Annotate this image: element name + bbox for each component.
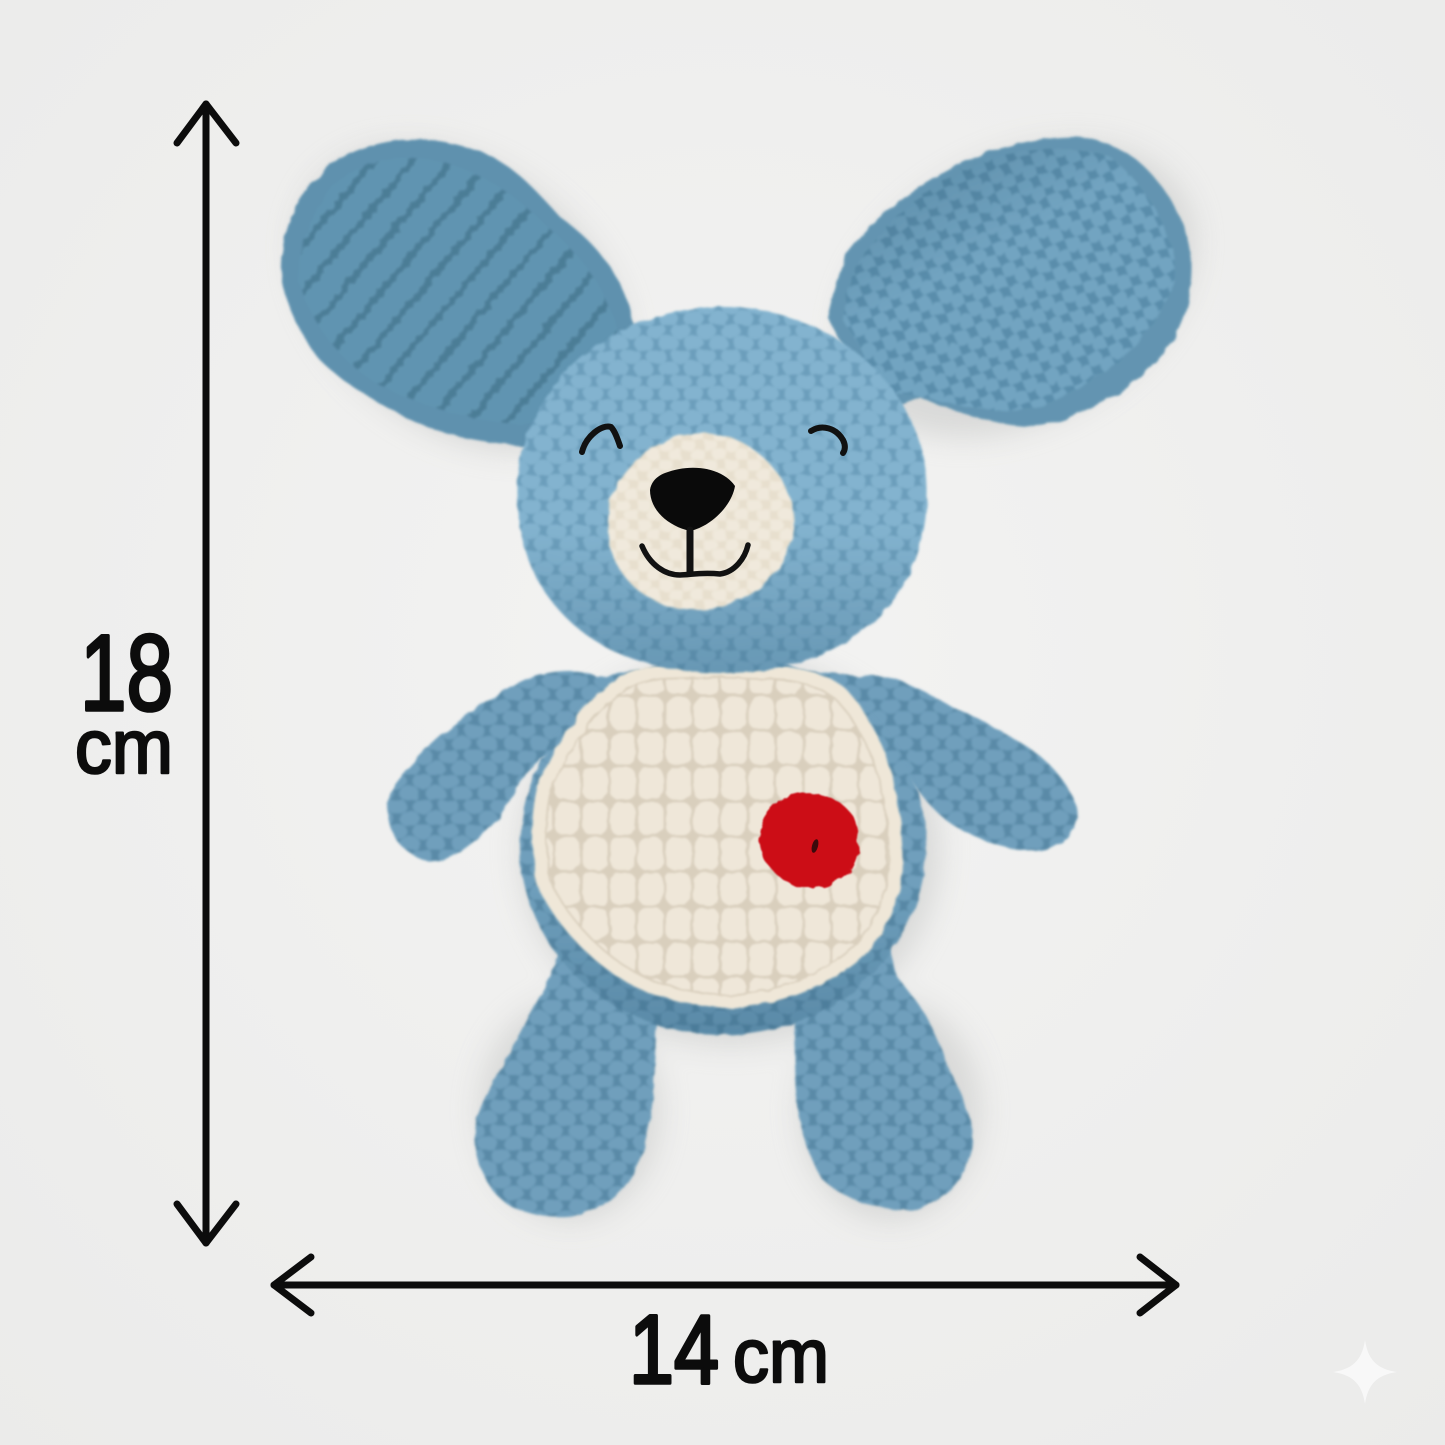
left eye (582, 427, 620, 452)
nose (650, 468, 735, 531)
width label: cm (733, 1314, 829, 1399)
belly patch (532, 665, 903, 1008)
red flower patch (759, 793, 859, 887)
crochet bunny toy (236, 82, 1248, 1220)
height label: 18 (80, 612, 173, 733)
right ear (828, 137, 1192, 426)
right arm (800, 670, 1077, 852)
right leg (792, 950, 973, 1210)
left ear (281, 139, 660, 450)
left leg (475, 950, 660, 1217)
height label (75, 612, 173, 790)
left arm (388, 670, 660, 861)
right eye (811, 428, 845, 453)
height label: cm (75, 705, 173, 790)
body (520, 655, 926, 1035)
icon: sparkle watermark (1333, 1340, 1397, 1404)
arrow: width dimension (274, 1257, 1176, 1313)
width label (629, 1295, 829, 1404)
width label: 14 (629, 1295, 719, 1404)
mouth (642, 530, 748, 575)
head (517, 307, 927, 673)
soft shadow (236, 82, 1248, 1220)
arrow: height dimension (177, 104, 236, 1243)
muzzle (607, 433, 794, 610)
